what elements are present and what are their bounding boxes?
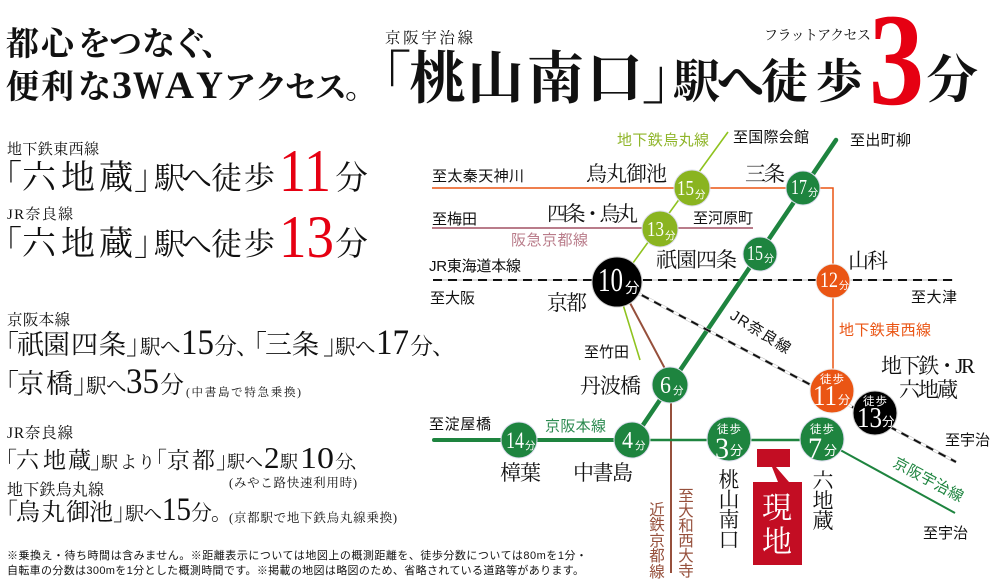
map labels: 地下鉄烏丸線: [617, 132, 709, 149]
Kintetsu vertical labels: 線: [649, 563, 665, 581]
line: JR Tokaido: [433, 279, 953, 281]
station: Momoyama-minamiguchi vertical: 口: [718, 528, 740, 552]
title: tagline: A: [165, 64, 194, 107]
text block: Keihan main line: 「三条」: [240, 330, 350, 360]
map labels: 至宇治: [945, 432, 990, 449]
marker: Rokujizo Keihan walk 7: [800, 417, 844, 465]
map labels: 至出町柳: [850, 132, 911, 149]
Kintetsu vertical labels: 近: [649, 501, 665, 519]
station names: 六地蔵: [899, 378, 958, 402]
marker: Gion-Shijo 15: [743, 237, 777, 271]
text block: Karasuma line: 分。: [191, 501, 232, 525]
map labels: 至河原町: [693, 210, 753, 227]
station names: 地下鉄・JR: [881, 354, 975, 378]
station names: 三条: [745, 162, 785, 186]
text block: Karasuma line: (京都駅で地下鉄烏丸線乗換): [229, 510, 397, 525]
marker: current site: 地: [762, 526, 792, 559]
marker: Yamashina 12: 分: [839, 280, 849, 292]
title: tagline: アクセス。: [224, 69, 377, 105]
marker: Rokujizo Keihan walk 7: 7: [808, 432, 822, 465]
title: tagline: 便利な: [6, 69, 111, 106]
text block: JR Nara to Kyoto: (みやこ路快速利用時): [229, 475, 357, 490]
text block: Keihan main line: 京阪本線: [7, 311, 70, 329]
station names: 山科: [848, 249, 888, 273]
marker: Gion-Shijo 15: 15: [747, 241, 763, 265]
title: tagline: [6, 26, 377, 107]
station names: 烏丸御池: [586, 162, 667, 186]
station markers: [501, 170, 897, 465]
station: Rokujizo vertical: 蔵: [812, 509, 834, 533]
line: Karasuma subway: [617, 132, 728, 360]
text block: JR Nara line Rokujizo: 分: [335, 226, 368, 263]
marker: Rokujizo JR walk 13: 分: [882, 415, 895, 429]
marker: Karasuma-Oike 15: [674, 170, 710, 206]
text block: Keihan main line: 17: [376, 322, 409, 362]
marker: Gion-Shijo 15: 分: [764, 253, 774, 265]
marker: Rokujizo subway walk 11: 徒歩: [820, 372, 844, 386]
station: Momoyama-minamiguchi vertical: 南: [718, 508, 740, 532]
station: Momoyama-minamiguchi vertical: 山: [718, 488, 740, 512]
station names: 丹波橋: [580, 374, 641, 398]
footnote: 自転車の分数は300mを1分とした概測時間です。※掲載の地図は略図のため、省略されている道路等があります。: [7, 563, 584, 577]
text block: JR Nara to Kyoto: 分、: [335, 452, 368, 472]
footnote: ※乗換え・待ち時間は含みません。※距離表示については地図上の概測距離を、徒歩分数については80mを1分・: [7, 548, 587, 562]
heading: walk to Momoyama-minamiguchi station: 「桃山南口」: [354, 48, 699, 111]
marker: Kyoto 10: 10: [598, 262, 623, 299]
heading: walk to Momoyama-minamiguchi station: フラットアクセス: [764, 29, 871, 44]
marker: Momoyama-minamiguchi walk 3: 徒歩: [717, 422, 741, 436]
station: Rokujizo vertical: 六: [812, 469, 834, 493]
text block: Tozai line Rokujizo: 地下鉄東西線: [7, 140, 99, 158]
title: tagline: 3: [112, 64, 132, 107]
marker: Karasuma-Oike 15: 分: [695, 189, 706, 201]
line: Tozai subway: [432, 188, 833, 392]
marker: Kuzuha 14: [501, 422, 537, 458]
marker: Tambabashi 6: [652, 367, 688, 403]
text block: JR Nara line Rokujizo: JR奈良線: [7, 206, 73, 223]
map labels: 京阪宇治線: [890, 455, 966, 506]
station names: [500, 162, 975, 552]
text block: JR Nara to Kyoto: [0, 424, 368, 490]
map labels: 至淀屋橋: [429, 416, 491, 433]
line: Keihan Uji: [822, 440, 955, 513]
title: tagline: 都心をつなぐ、: [6, 26, 234, 63]
marker: Rokujizo subway walk 11: 11: [813, 380, 837, 412]
Kintetsu vertical labels: 都: [649, 547, 665, 565]
map labels: JR奈良線: [727, 307, 794, 357]
text block: JR Nara to Kyoto: 2: [264, 440, 280, 475]
Kintetsu vertical labels: 大: [678, 502, 694, 520]
Kintetsu vertical labels: 寺: [678, 562, 694, 580]
marker: Kuzuha 14: 分: [525, 440, 536, 452]
marker: Rokujizo subway walk 11: 分: [838, 393, 850, 407]
Kintetsu vertical labels: 鉄: [649, 516, 665, 534]
text block: JR Nara to Kyoto: 駅より: [100, 453, 155, 472]
marker: Kuzuha 14: 14: [506, 428, 524, 453]
heading: walk to Momoyama-minamiguchi station: [354, 0, 978, 133]
Kintetsu vertical labels: 西: [678, 533, 694, 550]
text block: Tozai line Rokujizo: 駅へ徒歩: [153, 161, 275, 196]
marker: Yamashina 12: 12: [820, 267, 838, 292]
line: Keihan main: [434, 140, 836, 440]
footnote: [7, 548, 587, 577]
text block: JR Nara to Kyoto: 駅: [279, 452, 298, 472]
marker: Sanjo 17: [786, 171, 820, 205]
marker: current site: 現: [762, 492, 792, 525]
text block: Tozai line Rokujizo: 11: [279, 138, 331, 204]
text block: Keihan main line: 駅へ: [139, 336, 180, 359]
heading: walk to Momoyama-minamiguchi station: 駅へ徒歩: [671, 57, 864, 109]
marker: Chushojima 4: [614, 422, 650, 458]
text block: JR Nara to Kyoto: JR奈良線: [7, 424, 73, 442]
station names: 京都: [547, 291, 587, 315]
text block: Karasuma line: 15: [162, 492, 191, 528]
text block: JR Nara to Kyoto: 10: [300, 440, 334, 475]
Kintetsu vertical labels: [649, 488, 694, 581]
line: Hankyu Kyoto: [432, 227, 753, 229]
station names: 中書島: [573, 461, 633, 485]
text block: JR Nara line Rokujizo: 駅へ徒歩: [153, 227, 275, 262]
marker: Rokujizo JR walk 13: [853, 391, 897, 435]
map labels: 阪急京都線: [511, 232, 588, 249]
map labels: [429, 129, 990, 542]
map labels: 京阪本線: [545, 418, 606, 435]
text block: Keihan main line: 分: [160, 372, 184, 399]
map labels: 至竹田: [584, 344, 629, 361]
heading: walk to Momoyama-minamiguchi station: 分: [926, 53, 978, 110]
title: tagline: Y: [196, 64, 223, 107]
text block: Keihan main line: 駅へ: [85, 375, 126, 398]
marker: Sanjo 17: 17: [791, 175, 807, 199]
map labels: 至梅田: [432, 211, 477, 228]
station names: 樟葉: [500, 461, 541, 485]
marker: Rokujizo JR walk 13: 徒歩: [863, 394, 887, 408]
station names: 祇園四条: [656, 248, 737, 272]
marker: Rokujizo Keihan walk 7: 徒歩: [810, 422, 834, 436]
line: Kintetsu Kyoto: [630, 303, 671, 573]
marker: Chushojima 4: 4: [622, 428, 633, 454]
text block: Keihan main line: 分、: [410, 334, 455, 359]
heading: walk to Momoyama-minamiguchi station: 京阪宇治線: [385, 29, 473, 47]
route map lines: [432, 132, 956, 573]
text block: Keihan main line: 35: [126, 361, 159, 401]
text block: Keihan main line: 分、: [214, 334, 259, 359]
text block: JR Nara to Kyoto: 「京都」: [144, 448, 239, 473]
Kintetsu vertical labels: 京: [649, 532, 665, 550]
marker: Chushojima 4: 分: [635, 440, 646, 452]
marker: Rokujizo subway walk 11: [810, 369, 854, 413]
marker: Momoyama-minamiguchi walk 3: 分: [730, 443, 743, 458]
text block: Keihan main line: [0, 311, 455, 401]
marker: Kyoto 10: [592, 257, 642, 307]
marker: Sanjo 17: 分: [808, 187, 818, 199]
text block: Keihan main line: 15: [181, 322, 214, 362]
station: Rokujizo vertical: 地: [812, 489, 834, 513]
marker: Tambabashi 6: 6: [660, 373, 671, 399]
marker: Shijo-Karasuma 13: 分: [665, 230, 676, 242]
text block: Keihan main line: (中書島で特急乗換): [186, 385, 301, 399]
text block: Tozai line Rokujizo: [0, 138, 368, 204]
text block: JR Nara line Rokujizo: [0, 204, 368, 270]
map labels: 至国際会館: [733, 129, 809, 146]
text block: Keihan main line: 駅へ: [334, 336, 376, 359]
map labels: 至太秦天神川: [432, 168, 524, 185]
station: Momoyama-minamiguchi vertical: 桃: [718, 468, 740, 492]
marker: Rokujizo JR walk 13: 13: [857, 402, 882, 434]
Kintetsu vertical labels: 大: [678, 547, 694, 565]
marker: Momoyama-minamiguchi walk 3: 3: [715, 432, 729, 465]
text block: Karasuma line: 駅へ: [124, 503, 162, 525]
text block: JR Nara line Rokujizo: 13: [279, 204, 334, 270]
title: tagline: W: [133, 64, 164, 107]
text block: Karasuma line: [0, 480, 397, 528]
map labels: 至大津: [911, 289, 957, 306]
marker: Rokujizo Keihan walk 7: 分: [824, 443, 837, 458]
text block: Tozai line Rokujizo: 分: [335, 160, 368, 197]
text block: Karasuma line: 地下鉄烏丸線: [7, 480, 104, 499]
Kintetsu vertical labels: 至: [678, 488, 694, 505]
marker: Shijo-Karasuma 13: 13: [647, 217, 664, 241]
map labels: 至大阪: [430, 290, 475, 307]
marker: Momoyama-minamiguchi walk 3: [707, 417, 751, 465]
marker: current site: [753, 449, 802, 565]
marker: Karasuma-Oike 15: 15: [677, 176, 694, 200]
map labels: JR東海道本線: [429, 258, 521, 275]
line: JR Nara: [617, 282, 956, 462]
map labels: 地下鉄東西線: [839, 322, 931, 339]
marker: Yamashina 12: [816, 264, 850, 298]
marker: Kyoto 10: 分: [625, 280, 640, 297]
marker: Shijo-Karasuma 13: [642, 211, 678, 247]
marker: Tambabashi 6: 分: [673, 385, 684, 397]
map labels: 至宇治: [923, 525, 968, 542]
text block: JR Nara to Kyoto: 駅へ: [226, 452, 263, 472]
station names: 四条・烏丸: [547, 202, 638, 226]
Kintetsu vertical labels: 和: [678, 517, 694, 535]
